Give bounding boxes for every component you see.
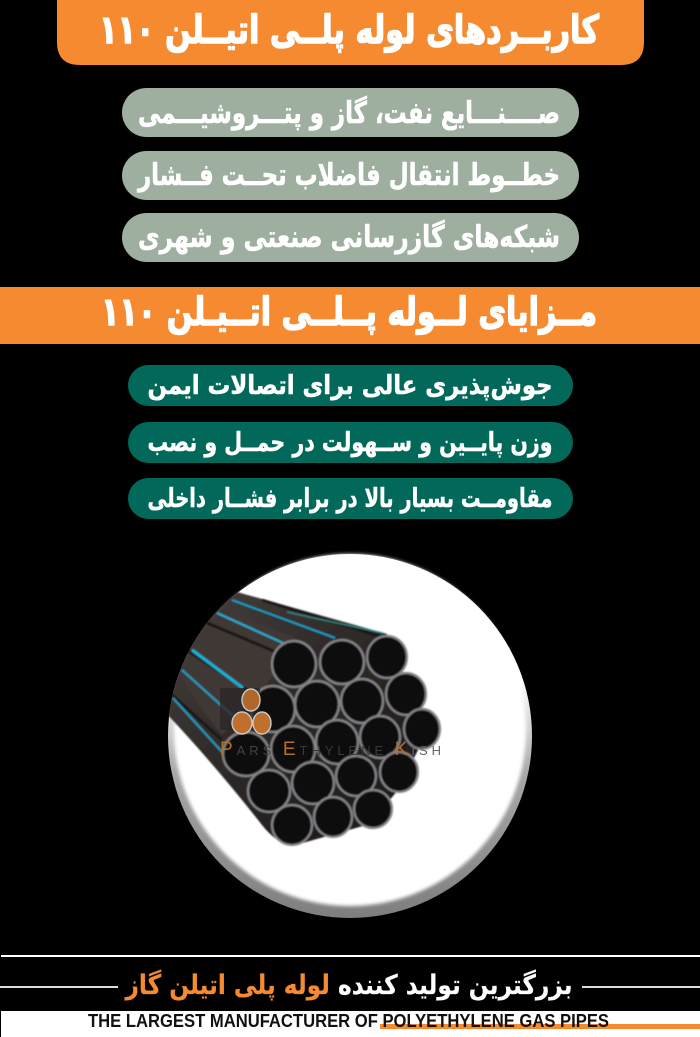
heading: applications bbox=[57, 0, 644, 65]
pill: gas distribution networks bbox=[122, 213, 579, 262]
watermark logo bbox=[220, 688, 441, 760]
english slogan: THE LARGEST MANUFACTURER OF POLYETHYLENE GAS PIPES bbox=[88, 1011, 609, 1031]
top rule bbox=[1, 955, 700, 957]
pipe openings bbox=[223, 636, 440, 845]
photo: bundle of polyethylene pipes in white circle bbox=[150, 554, 532, 918]
panel: applications list bbox=[122, 88, 579, 262]
pill: oil gas petrochemical: صــــنـــایع نفت، گاز و پتـــروشیـــمی bbox=[138, 95, 560, 131]
pill: low weight: وزن پایــین و ســهولت در حمــل و نصب bbox=[148, 428, 552, 458]
pill: pressure resistance bbox=[128, 478, 573, 519]
watermark logo: P ARS E THYLENE K ISH bbox=[220, 739, 441, 760]
white disc bbox=[168, 554, 532, 918]
footer right rule bbox=[582, 986, 700, 988]
pill: weldability: جوش‌پذیری عالی برای اتصالات ایمن bbox=[148, 371, 552, 401]
panel: advantages list bbox=[128, 365, 573, 519]
pill: pressurized sewage lines: خطــوط انتقال فاضلاب تحــت فــشار bbox=[136, 158, 560, 193]
pill: oil gas petrochemical bbox=[122, 88, 579, 137]
pipes bbox=[150, 592, 440, 846]
footer left rule bbox=[0, 986, 118, 988]
footer band bbox=[0, 955, 700, 1037]
pill: pressure resistance: مقاومــت بسیار بالا در برابر فشــار داخلی bbox=[148, 484, 552, 514]
footer persian slogan: بزرگترین تولید کننده لوله پلی اتیلن گاز bbox=[124, 969, 573, 1001]
orange accent bbox=[380, 1024, 700, 1029]
pill: low weight bbox=[128, 422, 573, 463]
pill: pressurized sewage lines bbox=[122, 151, 579, 200]
pill: weldability bbox=[128, 365, 573, 406]
heading: advantages bbox=[0, 287, 700, 344]
white strip bbox=[1, 1011, 700, 1037]
pill: gas distribution networks: شبکه‌های گازرسانی صنعتی و شهری bbox=[138, 219, 560, 255]
